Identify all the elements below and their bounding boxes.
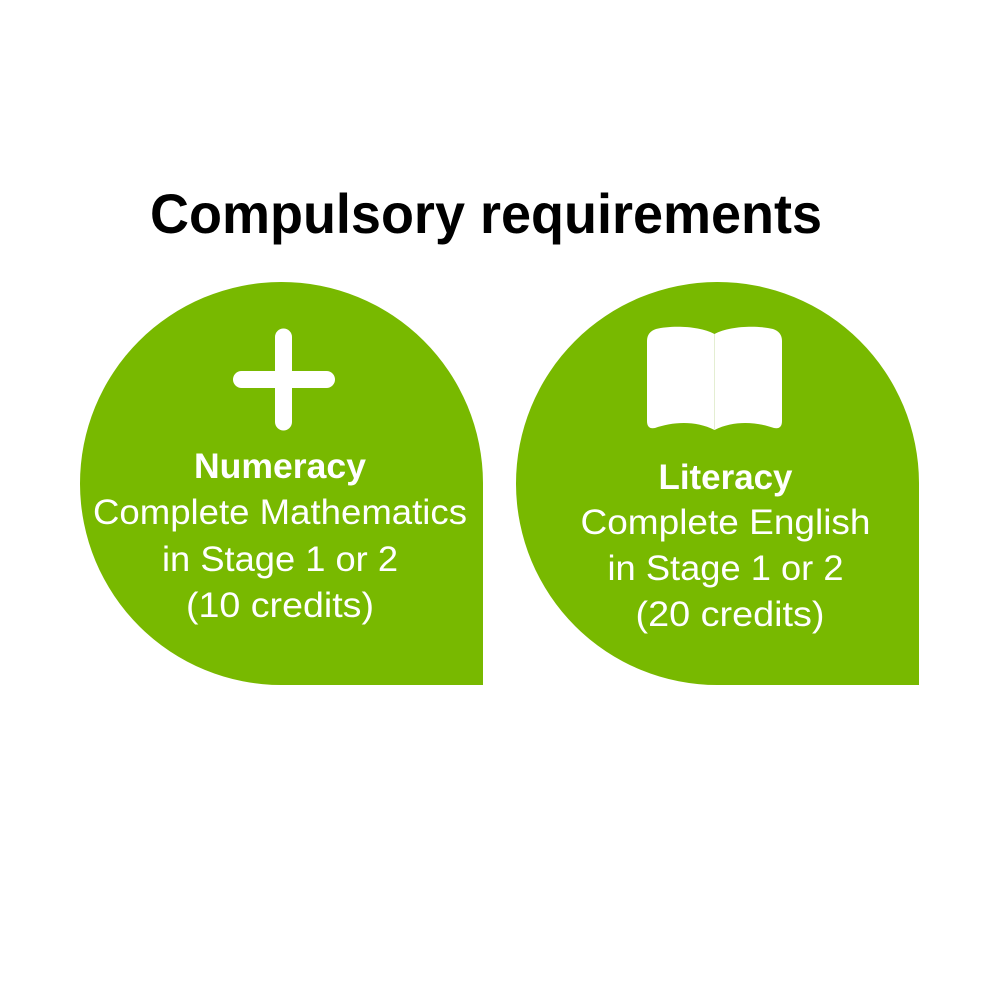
literacy heading: Literacy xyxy=(658,458,793,497)
literacy description xyxy=(580,503,870,634)
panel background: literacy teardrop xyxy=(516,282,919,685)
icon: plus xyxy=(242,337,326,422)
title: Compulsory requirements xyxy=(150,182,822,245)
panel: numeracy xyxy=(80,282,483,685)
panel background: numeracy teardrop xyxy=(80,282,483,685)
literacy description: Complete English xyxy=(580,503,870,542)
literacy description: (20 credits) xyxy=(636,595,824,634)
panel: literacy xyxy=(516,282,919,685)
literacy description: in Stage 1 or 2 xyxy=(608,549,844,588)
numeracy description xyxy=(93,493,467,625)
numeracy heading: Numeracy xyxy=(194,447,367,486)
numeracy description: in Stage 1 or 2 xyxy=(162,540,398,579)
numeracy description: (10 credits) xyxy=(186,586,374,625)
icon: open book xyxy=(647,327,782,430)
numeracy description: Complete Mathematics xyxy=(93,493,467,532)
